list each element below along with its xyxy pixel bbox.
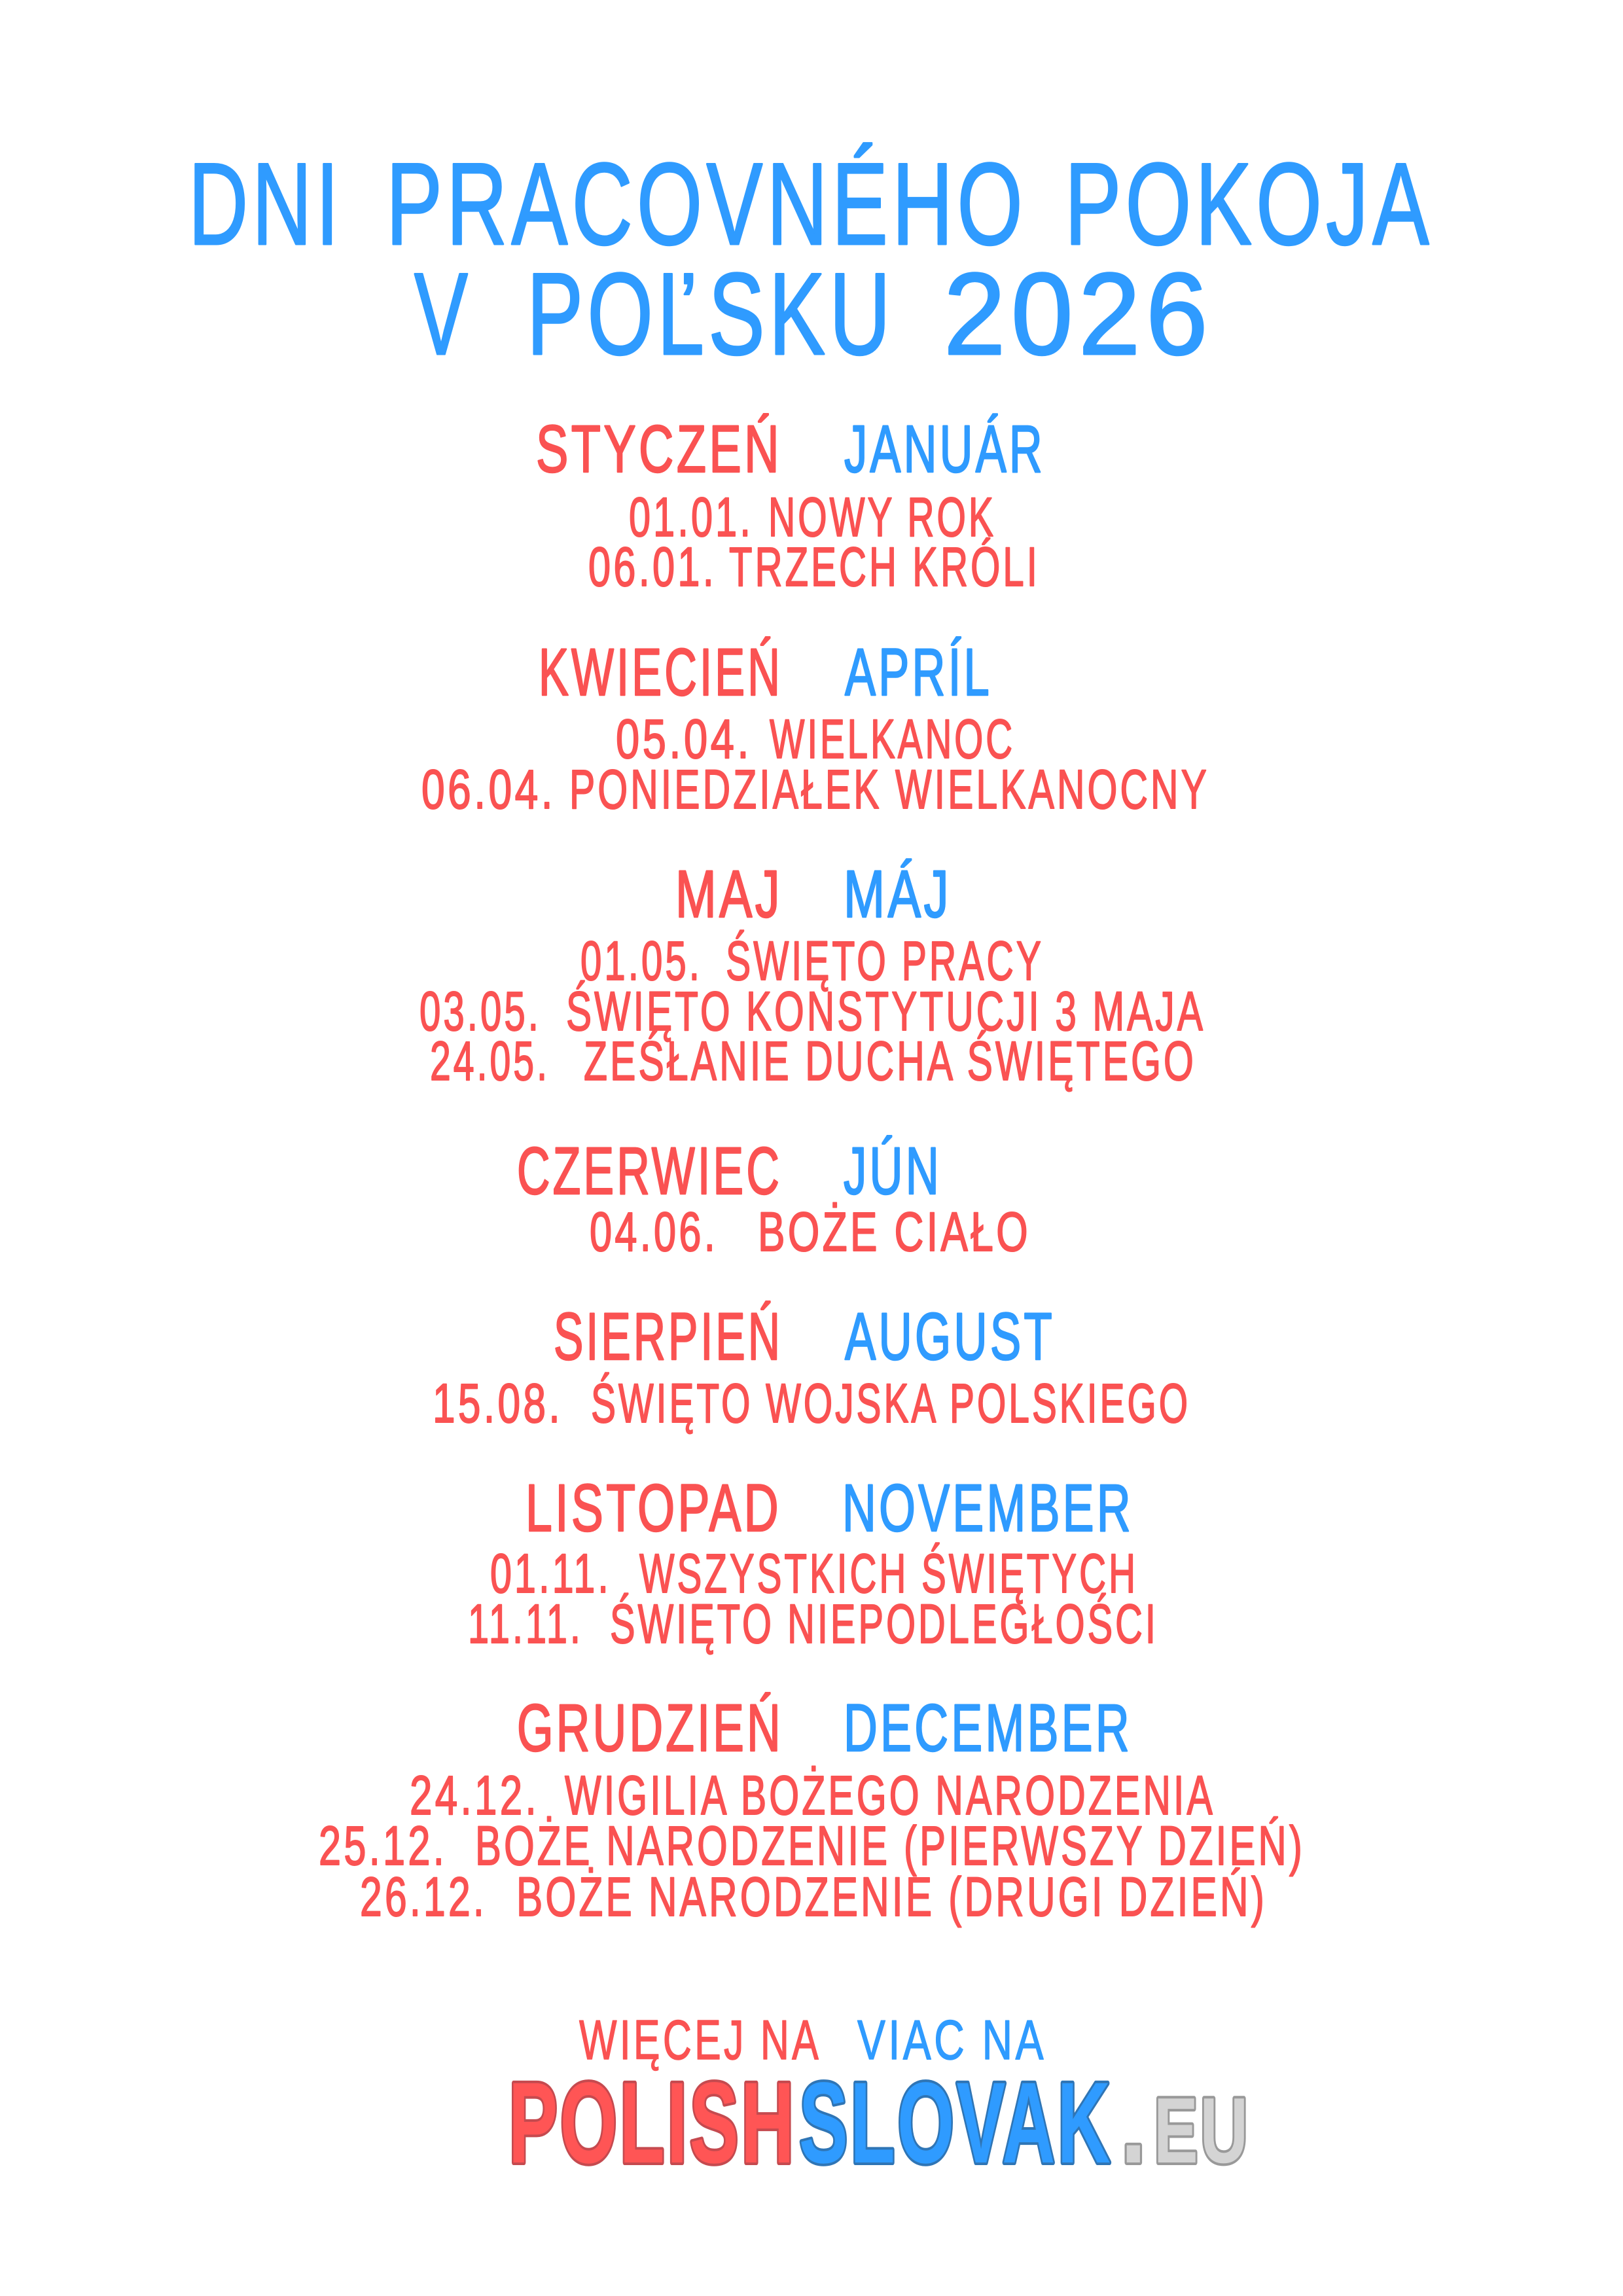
month heading: maj / máj: MAJ (675, 857, 783, 931)
panel: november (468, 1471, 1158, 1655)
month heading: listopad / november (526, 1471, 1133, 1545)
title: POKOJA (1065, 139, 1433, 269)
holidays: may (419, 930, 1205, 1092)
month heading: sierpień / august: SIERPIEŃ (554, 1299, 783, 1374)
month heading: sierpień / august: AUGUST (845, 1299, 1055, 1374)
holidays: november: ŚWIĘTO NIEPODLEGŁOŚCI (610, 1593, 1158, 1655)
panel: august (433, 1299, 1190, 1434)
title: DNI (188, 139, 343, 269)
panel: december (319, 1691, 1305, 1928)
holidays: december: BOŻE NARODZENIE (DRUGI DZIEŃ) (516, 1866, 1267, 1928)
holidays: december: BOŻE NARODZENIE (PIERWSZY DZIEŃ) (475, 1815, 1305, 1876)
holidays: august: ŚWIĘTO WOJSKA POLSKIEGO (591, 1372, 1190, 1434)
month heading: czerwiec / jún: JÚN (844, 1134, 942, 1208)
holidays: june: 04.06. (590, 1201, 718, 1263)
holidays: december (319, 1765, 1305, 1928)
holidays: may: 24.05. (430, 1030, 550, 1092)
title: PRACOVNÉHO (386, 139, 1027, 269)
title: POĽSKU (527, 249, 895, 379)
holidays: november: 01.11. (490, 1543, 611, 1604)
panel: jún (517, 1134, 1031, 1263)
more info line: WIĘCEJ NA (579, 2009, 821, 2072)
holidays: april: 06.04. (421, 759, 556, 820)
holidays: november (468, 1543, 1158, 1655)
month heading: listopad / november: NOVEMBER (842, 1471, 1133, 1545)
holidays: june: BOŻE CIAŁO (758, 1201, 1031, 1263)
title: V (414, 249, 472, 379)
holidays: december: 24.12. (410, 1765, 539, 1826)
month heading: listopad / november: LISTOPAD (526, 1471, 781, 1545)
title: 2026 (944, 249, 1213, 379)
holidays: april: WIELKANOC (770, 708, 1015, 770)
panel: január (536, 412, 1045, 598)
holidays: december: 25.12. (319, 1815, 447, 1876)
holidays: november: WSZYSTKICH ŚWIĘTYCH (639, 1543, 1138, 1604)
month heading: styczeń / január (536, 412, 1045, 486)
holidays: april (421, 708, 1209, 820)
month heading: grudzień / december: GRUDZIEŃ (517, 1691, 783, 1765)
month heading: czerwiec / jún: CZERWIEC (517, 1134, 782, 1208)
holidays: april: PONIEDZIAŁEK WIELKANOCNY (569, 759, 1209, 820)
month heading: grudzień / december: DECEMBER (844, 1691, 1132, 1765)
panel: máj (419, 857, 1205, 1092)
holidays: january: TRZECH KRÓLI (729, 536, 1040, 598)
month heading: sierpień / august (554, 1299, 1055, 1374)
holidays: december: 26.12. (360, 1866, 487, 1928)
holidays: may: 03.05. (419, 980, 541, 1042)
logo: polishslovak.eu: POLISH (508, 2059, 796, 2187)
title (188, 139, 1433, 379)
holidays: january: NOWY ROK (768, 486, 996, 548)
holidays: january: 01.01. (629, 486, 753, 548)
month heading: maj / máj: MÁJ (844, 857, 952, 931)
month heading: grudzień / december (517, 1691, 1132, 1765)
logo: polishslovak.eu: . (1120, 2059, 1149, 2187)
holidays: may: 01.05. (580, 930, 702, 992)
month heading: maj / máj (675, 857, 952, 931)
logo: polishslovak.eu: SLOVAK (799, 2059, 1113, 2187)
holidays: january: 06.01. (588, 536, 717, 598)
holidays: may: ŚWIĘTO KONSTYTUCJI 3 MAJA (566, 980, 1205, 1042)
logo: polishslovak.eu (508, 2059, 1250, 2187)
holidays: june (590, 1201, 1031, 1263)
holidays: august (433, 1372, 1190, 1434)
more info line: VIAC NA (857, 2009, 1046, 2072)
holidays: may: ŚWIĘTO PRACY (726, 930, 1044, 992)
holidays: august: 15.08. (433, 1372, 563, 1434)
holidays: december: WIGILIA BOŻEGO NARODZENIA (565, 1765, 1215, 1826)
month heading: kwiecień / apríl: KWIECIEŃ (539, 635, 783, 709)
holidays: may: ZEŚŁANIE DUCHA ŚWIĘTEGO (584, 1030, 1196, 1092)
month heading: styczeń / január: STYCZEŃ (536, 412, 782, 486)
panel: apríl (421, 635, 1209, 820)
holidays: january (588, 486, 1040, 598)
month heading: styczeń / január: JANUÁR (844, 412, 1045, 486)
month heading: kwiecień / apríl: APRÍL (845, 635, 992, 709)
holidays: april: 05.04. (616, 708, 752, 770)
logo: polishslovak.eu: EU (1154, 2079, 1250, 2183)
holidays: november: 11.11. (468, 1593, 583, 1655)
